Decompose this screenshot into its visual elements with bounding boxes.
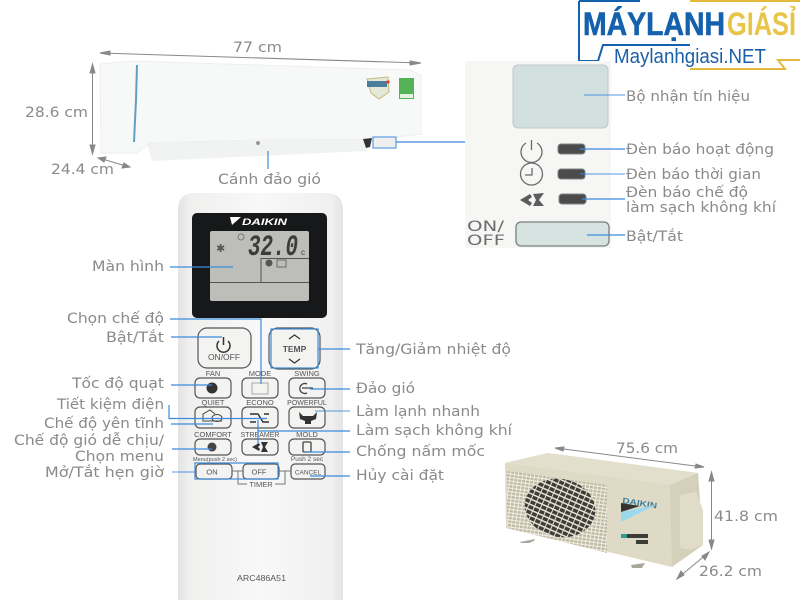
mounting feet: [520, 539, 645, 568]
arrow: height of indoor unit: [90, 64, 95, 154]
arrow: depth of indoor unit: [98, 157, 130, 168]
callout: on off: Bật/Tắt: [626, 228, 683, 245]
callout: econo: [56, 396, 267, 418]
label: 77 cm: 77 cm: [233, 40, 282, 56]
lcd display: ✱: [216, 242, 225, 255]
callout: on off: Bật/Tắt: [106, 329, 164, 346]
button labels: MODE: [249, 369, 271, 378]
brand mark: [621, 496, 658, 522]
timer label: TIMER: [249, 480, 273, 489]
button labels: STREAMER: [241, 432, 279, 439]
button labels: SWING: [294, 369, 320, 378]
icon: energy badge: [367, 77, 390, 99]
label: 28.6 cm: 28.6 cm: [25, 105, 88, 121]
button: on off: [198, 328, 251, 368]
remote screen bezel: [192, 213, 327, 318]
buttons row four: CANCEL: [295, 470, 322, 476]
callout: temperature: Tăng/Giảm nhiệt độ: [355, 342, 511, 358]
signal receiver window: [513, 65, 608, 128]
on off button: [516, 222, 609, 246]
callout: timer on off: [45, 463, 278, 481]
buttons row three: [195, 439, 325, 455]
on off text: ON/: [467, 219, 504, 235]
condenser grille: [507, 471, 607, 553]
lcd display: c: [301, 248, 305, 257]
callout: comfort and menu: [14, 432, 212, 465]
indoor unit: [100, 61, 421, 161]
callout: streamer light: làm sạch không khí: [626, 200, 777, 216]
buttons row four: OFF: [252, 468, 267, 476]
callout: powerful: Làm lạnh nhanh: [356, 404, 480, 420]
button: on off: ON/OFF: [208, 352, 240, 362]
callout: mold: Chống nấm mốc: [356, 443, 485, 460]
outdoor unit: [505, 453, 703, 568]
right callouts: [258, 329, 513, 484]
callout: streamer: Làm sạch không khí: [356, 423, 513, 439]
button: temp: [269, 328, 320, 369]
arrow: width of outdoor unit: [555, 447, 704, 468]
buttons row four: ON: [206, 468, 218, 476]
icon: power: [521, 140, 542, 162]
callout: fan speed: Tốc độ quạt: [71, 375, 164, 392]
callout: comfort and menu: Chọn menu: [75, 449, 164, 465]
panel callouts: [580, 89, 777, 245]
leader: indoor unit to detail panel: [396, 141, 466, 143]
arrow: depth of outdoor unit: [677, 552, 709, 579]
callout: cancel: [310, 468, 444, 484]
sensor highlight box: [373, 137, 396, 148]
panel: indoor unit detail: [465, 61, 611, 249]
callout: quiet: Chế độ yên tĩnh: [44, 415, 164, 432]
inverter sticker: [621, 534, 648, 544]
lcd display: [210, 231, 309, 301]
on off text: [467, 219, 505, 249]
button labels: QUIET: [202, 398, 225, 407]
daikin logo: [230, 217, 289, 228]
callout: on off: [106, 329, 222, 346]
remote control: [178, 193, 343, 600]
callout: on off: [587, 228, 683, 245]
callout: cancel: Hủy cài đặt: [356, 468, 444, 484]
label: 41.8 cm: 41.8 cm: [714, 509, 778, 525]
logo: [578, 0, 800, 70]
callout: swing: [310, 381, 415, 397]
callout: streamer light: Đèn báo chế độ: [626, 184, 748, 201]
buttons row one: [195, 378, 325, 398]
callout: timer on off: Mở/Tắt hẹn giờ: [45, 464, 164, 481]
button labels: [193, 369, 327, 463]
leader: air flap: [267, 151, 269, 169]
buttons row two: [195, 407, 325, 428]
lcd display: 32.0: [248, 231, 298, 265]
button labels: Push 2 sec: [291, 456, 324, 463]
button labels: FAN: [206, 369, 220, 378]
label: air flap: Cánh đảo gió: [218, 172, 321, 188]
callout: econo: Tiết kiệm điện: [56, 396, 164, 413]
label: 24.4 cm: 24.4 cm: [51, 162, 114, 178]
callout: signal receiver: Bộ nhận tín hiệu: [626, 89, 750, 105]
callout: swing: Đảo gió: [356, 381, 415, 397]
arrow: width of indoor unit: [100, 51, 421, 65]
logo wordmark blue: MÁYLẠNH: [583, 6, 725, 42]
buttons row four: [196, 464, 325, 484]
callout: screen: Màn hình: [92, 259, 164, 275]
button labels: COMFORT: [194, 430, 232, 439]
left callouts: [14, 259, 278, 481]
led indicators: [558, 144, 586, 204]
model name: ARC486A51: [237, 573, 286, 583]
logo website: Maylanhgiasi.NET: [614, 46, 766, 68]
icon: green energy label: [399, 78, 414, 99]
icon: streamer: [520, 193, 544, 206]
callout: mode: [67, 310, 261, 384]
icon: clock: [520, 163, 542, 185]
callout: timer light: Đèn báo thời gian: [626, 167, 761, 183]
button labels: Menu(push 2 sec): [193, 457, 237, 463]
button: temp: TEMP: [283, 344, 307, 354]
callout: mode: Chọn chế độ: [67, 310, 164, 327]
label: 26.2 cm: 26.2 cm: [699, 564, 762, 580]
callout: temperature: [271, 329, 511, 368]
callout: streamer: [258, 420, 513, 444]
on off text: OFF: [467, 233, 505, 249]
arrow: height of outdoor unit: [709, 472, 714, 549]
callout: operation light: Đèn báo hoạt động: [626, 142, 774, 158]
callout: comfort and menu: Chế độ gió dễ chịu/: [14, 432, 164, 449]
label: 75.6 cm: 75.6 cm: [616, 441, 678, 457]
brand mark: DAIKIN: [622, 496, 658, 510]
button labels: ECONO: [246, 398, 274, 407]
callout: streamer light: [582, 184, 777, 216]
daikin logo: DAIKIN: [242, 217, 289, 228]
button labels: MOLD: [296, 430, 318, 439]
button labels: POWERFUL: [287, 400, 327, 407]
